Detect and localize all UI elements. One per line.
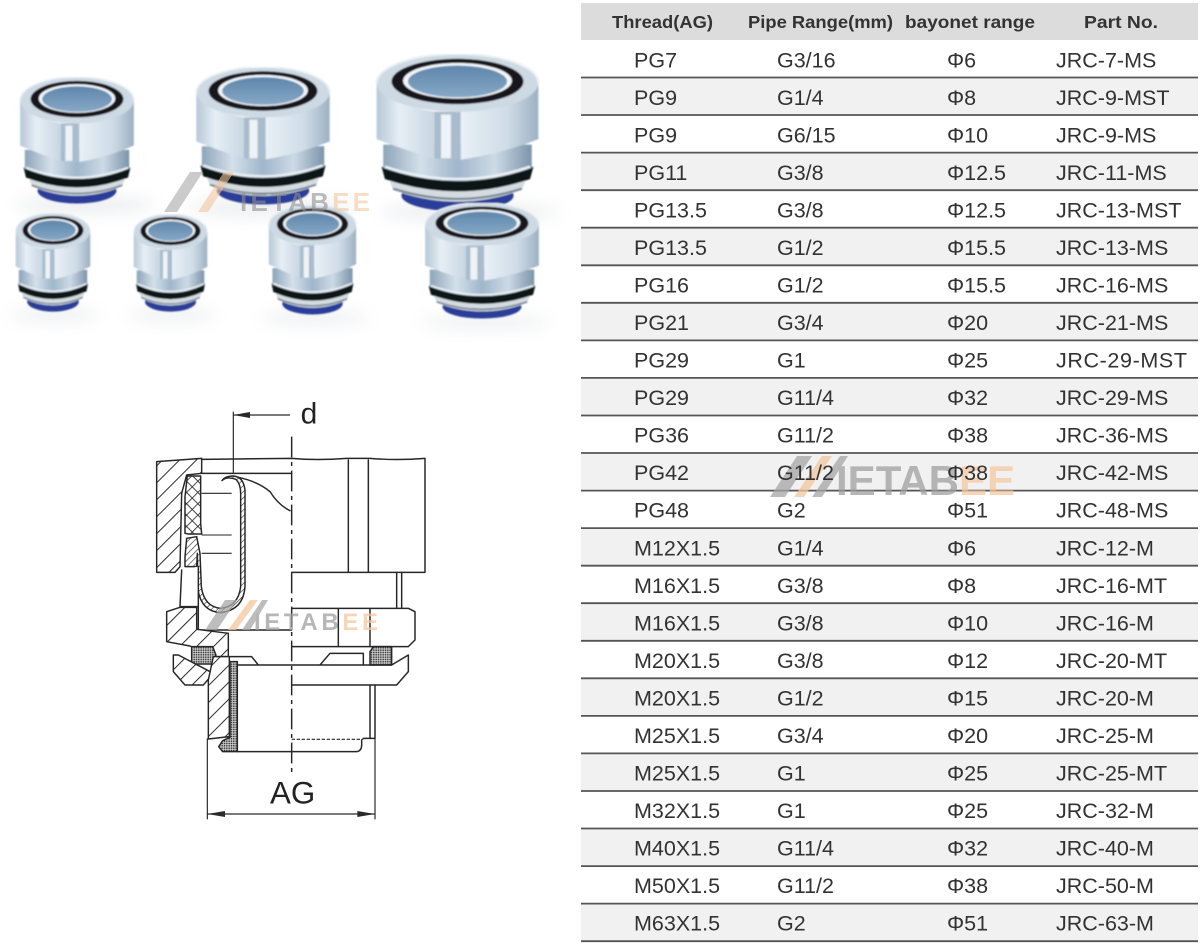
row M12X1.5: M12X1.5 (634, 536, 720, 560)
row M25X1.5 MT: Φ25 (947, 761, 988, 785)
row PG48: G2 (777, 499, 806, 523)
watermark over drawing (205, 600, 378, 636)
row PG36: JRC-36-MS (1056, 424, 1168, 448)
row PG48: Φ51 (947, 499, 988, 523)
row M12X1.5: G1/4 (777, 536, 824, 560)
row M32X1.5: Φ25 (947, 799, 988, 823)
row M40X1.5: M40X1.5 (634, 836, 720, 860)
row PG21 (634, 311, 1168, 335)
header band (581, 3, 1198, 40)
row M20X1.5 M: G1/2 (777, 686, 824, 710)
row M16X1.5 MT: JRC-16-MT (1056, 574, 1167, 598)
row M63X1.5: G2 (777, 912, 806, 936)
row PG42: PG42 (634, 461, 689, 485)
row PG16: JRC-16-MS (1056, 274, 1168, 298)
row M63X1.5: M63X1.5 (634, 912, 720, 936)
row M25X1.5 M: G3/4 (777, 724, 824, 748)
row PG21: JRC-21-MS (1056, 311, 1168, 335)
row PG13.5 MST: JRC-13-MST (1056, 199, 1181, 223)
row PG9 MS: G6/15 (777, 124, 836, 148)
header band: Part No. (1084, 12, 1158, 32)
row M50X1.5: G11/2 (777, 874, 834, 898)
row PG16: Φ15.5 (947, 274, 1006, 298)
fitting: bottom first (16, 213, 90, 312)
row PG11: JRC-11-MS (1056, 161, 1167, 185)
watermark over photo: IETABEE (240, 187, 370, 217)
row PG9 MST (634, 86, 1169, 110)
fitting: bottom third (269, 205, 356, 315)
row M20X1.5 M: JRC-20-M (1056, 686, 1154, 710)
row PG21: PG21 (634, 311, 689, 335)
row PG9 MS: Φ10 (947, 124, 988, 148)
fitting: bottom fourth (425, 203, 539, 318)
threaded body section (208, 657, 229, 739)
row PG42: G11/2 (777, 461, 834, 485)
row PG29 MS: JRC-29-MS (1056, 386, 1168, 410)
row PG48: PG48 (634, 499, 689, 523)
dimension AG: AG (270, 776, 315, 811)
row PG11: Φ12.5 (947, 161, 1006, 185)
row M16X1.5 MT: Φ8 (947, 574, 976, 598)
row M40X1.5 (634, 836, 1154, 860)
row PG7: JRC-7-MS (1056, 48, 1156, 72)
flange (173, 655, 213, 685)
row PG29 MST: JRC-29-MST (1056, 349, 1187, 373)
dimension d (233, 398, 317, 473)
row PG36 (634, 424, 1168, 448)
row M32X1.5: M32X1.5 (634, 799, 720, 823)
row M16X1.5 M (634, 611, 1154, 635)
row M25X1.5 MT (634, 761, 1167, 785)
row PG11 (634, 161, 1167, 185)
row PG9 MST: PG9 (634, 86, 677, 110)
alternating row shading (581, 78, 1198, 941)
row PG48: JRC-48-MS (1056, 499, 1168, 523)
row M25X1.5 MT: JRC-25-MT (1056, 761, 1167, 785)
row PG36: G11/2 (777, 424, 834, 448)
row M50X1.5 (634, 874, 1154, 898)
row M12X1.5 (634, 536, 1154, 560)
row M25X1.5 M (634, 724, 1154, 748)
row PG13.5 MS (634, 236, 1168, 260)
header band: Pipe Range(mm) (748, 12, 893, 32)
row M20X1.5 MT: M20X1.5 (634, 649, 720, 673)
row PG13.5 MS: G1/2 (777, 236, 824, 260)
crimp seal, cross-hatched (185, 476, 202, 534)
body wall (180, 567, 198, 607)
row PG29 MST: PG29 (634, 349, 689, 373)
row PG29 MST: G1 (777, 349, 806, 373)
row PG13.5 MS: PG13.5 (634, 236, 707, 260)
threaded body right edge (363, 685, 375, 738)
row M16X1.5 MT: G3/8 (777, 574, 824, 598)
row PG7: Φ6 (947, 48, 976, 72)
sleeve bottom edge (237, 740, 362, 752)
inner liner lines (202, 493, 232, 553)
row M12X1.5: Φ6 (947, 536, 976, 560)
row PG7: G3/16 (777, 48, 836, 72)
row PG42: JRC-42-MS (1056, 461, 1168, 485)
row PG9 MS (634, 124, 1156, 148)
row PG29 MS: Φ32 (947, 386, 988, 410)
row PG9 MST: JRC-9-MST (1056, 86, 1169, 110)
row PG7: PG7 (634, 48, 677, 72)
watermark over photo (164, 172, 370, 217)
row M20X1.5 M: M20X1.5 (634, 686, 720, 710)
row M63X1.5: Φ51 (947, 912, 988, 936)
row M63X1.5 (634, 912, 1154, 936)
row PG9 MST: Φ8 (947, 86, 976, 110)
fitting: top right (377, 54, 538, 211)
row M20X1.5 MT (634, 649, 1167, 673)
row M63X1.5: JRC-63-M (1056, 912, 1154, 936)
row PG29 MST: Φ25 (947, 349, 988, 373)
row PG36: Φ38 (947, 424, 988, 448)
row PG42: Φ38 (947, 461, 988, 485)
row M20X1.5 M (634, 686, 1154, 710)
inner sleeve, dotted (219, 662, 237, 752)
row PG21: G3/4 (777, 311, 824, 335)
row PG29 MS: G11/4 (777, 386, 834, 410)
row PG13.5 MST: Φ12.5 (947, 199, 1006, 223)
watermark over drawing: IETABEE (254, 609, 378, 636)
row M32X1.5: G1 (777, 799, 806, 823)
row M40X1.5: JRC-40-M (1056, 836, 1154, 860)
row M40X1.5: G11/4 (777, 836, 834, 860)
fitting: bottom second (134, 214, 207, 312)
top nut right half (202, 458, 425, 572)
row M20X1.5 MT: JRC-20-MT (1056, 649, 1167, 673)
row M40X1.5: Φ32 (947, 836, 988, 860)
top nut section, hatched (157, 458, 202, 572)
dimension AG (207, 738, 375, 819)
row M25X1.5 MT: M25X1.5 (634, 761, 720, 785)
specification table (581, 3, 1198, 941)
row M16X1.5 M: JRC-16-M (1056, 611, 1154, 635)
row PG42 (634, 461, 1168, 485)
row PG29 MS: PG29 (634, 386, 689, 410)
row PG16 (634, 274, 1168, 298)
header band: Thread(AG) (612, 12, 713, 32)
row PG13.5 MST: PG13.5 (634, 199, 707, 223)
row PG13.5 MST (634, 199, 1181, 223)
dimension d: d (301, 398, 317, 431)
row M50X1.5: M50X1.5 (634, 874, 720, 898)
o-ring seals, dotted (192, 647, 392, 665)
row PG36: PG36 (634, 424, 689, 448)
row M16X1.5 M: Φ10 (947, 611, 988, 635)
clip inner edge curve (238, 477, 290, 511)
header band: bayonet range (905, 12, 1035, 32)
row M16X1.5 MT: M16X1.5 (634, 574, 720, 598)
row PG21: Φ20 (947, 311, 988, 335)
row PG13.5 MS: Φ15.5 (947, 236, 1006, 260)
row M16X1.5 M: G3/8 (777, 611, 824, 635)
row M12X1.5: JRC-12-M (1056, 536, 1154, 560)
table rows (634, 48, 1187, 936)
technical drawing: connector cross-section (157, 398, 425, 819)
row PG7 (634, 48, 1156, 72)
row M20X1.5 MT: G3/8 (777, 649, 824, 673)
lock nut section, hatched (167, 607, 228, 657)
row M20X1.5 M: Φ15 (947, 686, 988, 710)
row M25X1.5 M: JRC-25-M (1056, 724, 1154, 748)
row PG29 MS (634, 386, 1168, 410)
row PG48 (634, 499, 1168, 523)
row PG16: G1/2 (777, 274, 824, 298)
row PG13.5 MS: JRC-13-MS (1056, 236, 1168, 260)
row PG9 MS: JRC-9-MS (1056, 124, 1156, 148)
watermark over table: IETABEE (836, 457, 1015, 504)
row M32X1.5 (634, 799, 1154, 823)
row M16X1.5 MT (634, 574, 1167, 598)
row PG13.5 MST: G3/8 (777, 199, 824, 223)
row M50X1.5: JRC-50-M (1056, 874, 1154, 898)
row M25X1.5 M: M25X1.5 (634, 724, 720, 748)
row PG16: PG16 (634, 274, 689, 298)
row PG9 MST: G1/4 (777, 86, 824, 110)
row PG9 MS: PG9 (634, 124, 677, 148)
fitting: top left (20, 77, 134, 203)
row M16X1.5 M: M16X1.5 (634, 611, 720, 635)
row M25X1.5 M: Φ20 (947, 724, 988, 748)
row M25X1.5 MT: G1 (777, 761, 806, 785)
row M20X1.5 MT: Φ12 (947, 649, 988, 673)
row PG11: PG11 (634, 161, 687, 185)
row M50X1.5: Φ38 (947, 874, 988, 898)
fitting: top middle (196, 67, 330, 204)
spiral clip section (185, 476, 245, 613)
photo soft shadows (10, 198, 560, 327)
row M32X1.5: JRC-32-M (1056, 799, 1154, 823)
product photo: eight connector fittings (10, 54, 560, 327)
dashed centre line (289, 437, 294, 773)
lock nut right half (292, 572, 415, 647)
row PG11: G3/8 (777, 161, 824, 185)
row PG29 MST (634, 349, 1187, 373)
